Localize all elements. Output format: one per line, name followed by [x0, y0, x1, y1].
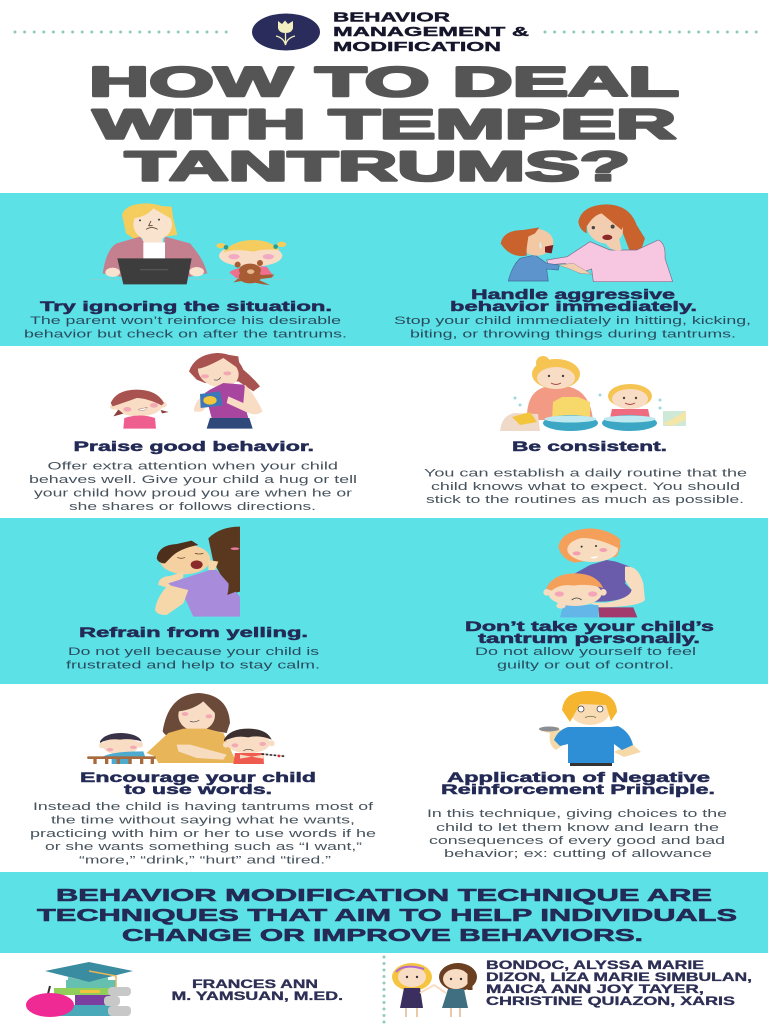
heading: Don’t take your child’s — [465, 618, 714, 634]
body text: Stop your child immediately in hitting, kicking, — [394, 315, 751, 327]
body text: You can establish a daily routine that the — [424, 468, 747, 480]
body text: Do not yell because your child is — [68, 646, 320, 658]
student names — [486, 960, 752, 1008]
heading: Handle aggressive — [471, 286, 675, 302]
icon: tulip logo — [252, 14, 320, 50]
panel: application of negative reinforcement — [427, 691, 727, 860]
heading: tantrum personally. — [478, 630, 700, 646]
body text: the time without saying what he wants, — [51, 814, 355, 826]
panel: praise good behavior — [29, 352, 357, 513]
organisation name: MANAGEMENT & — [333, 24, 529, 39]
panel: don't take tantrum personally — [465, 528, 714, 672]
heading: Be consistent. — [512, 438, 667, 454]
heading: Try ignoring the situation. — [40, 298, 332, 314]
icon: mother holding crying child — [501, 204, 673, 282]
body text — [424, 468, 747, 506]
body text — [30, 801, 376, 866]
banner: definition: CHANGE OR IMPROVE BEHAVIORS. — [122, 925, 643, 945]
icon: mother showing card to daughter — [110, 352, 263, 429]
student names: MAICA ANN JOY TAYER, — [486, 984, 704, 996]
icon: mother with two children — [87, 693, 285, 764]
student names: CHRISTINE QUIAZON, XARIS — [486, 996, 736, 1008]
icon: books, graduation cap and apple — [26, 962, 133, 1017]
organisation name — [333, 10, 529, 54]
body text: guilty or out of control. — [497, 660, 674, 672]
panel: be consistent — [424, 356, 747, 506]
body text: child to let them know and learn the — [436, 822, 719, 834]
header — [15, 10, 764, 54]
body text — [24, 315, 347, 340]
panel: encourage your child to use words — [30, 693, 376, 866]
heading: behavior immediately. — [450, 298, 697, 314]
body text: practicing with him or her to use words if he — [30, 828, 376, 840]
body text — [427, 808, 727, 860]
student names: DIZON, LIZA MARIE SIMBULAN, — [486, 972, 752, 984]
title: WITH TEMPER — [93, 100, 676, 148]
body text: “more,” “drink,” “hurt” and “tired.” — [79, 854, 332, 866]
body text — [394, 315, 751, 340]
title: TANTRUMS? — [125, 142, 630, 190]
heading: Application of Negative — [447, 769, 710, 785]
heading: to use words. — [124, 781, 272, 797]
body text: stick to the routines as much as possible. — [426, 494, 744, 506]
body text: In this technique, giving choices to the — [427, 808, 727, 820]
body text: your child how proud you are when he or — [34, 488, 353, 500]
body text: The parent won’t reinforce his desirable — [30, 315, 341, 327]
body text: Offer extra attention when your child — [48, 460, 338, 472]
icon: mother and child washing clothes — [500, 356, 686, 431]
body text: behavior; ex: cutting of allowance — [444, 848, 712, 860]
instructor name: M. YAMSUAN, M.ED. — [172, 991, 343, 1003]
banner: definition: TECHNIQUES THAT AIM TO HELP INDIVIDUALS — [37, 905, 737, 925]
heading: Praise good behavior. — [74, 438, 314, 454]
heading: Reinforcement Principle. — [441, 781, 715, 797]
body text: behaves well. Give your child a hug or tell — [29, 474, 357, 486]
heading — [465, 618, 714, 646]
body text: frustrated and help to stay calm. — [66, 660, 320, 672]
instructor name — [172, 979, 343, 1003]
body text: behavior but check on after the tantrums. — [24, 328, 347, 340]
icon: two schoolgirls — [392, 963, 477, 1017]
heading: Refrain from yelling. — [79, 624, 308, 640]
icon: mother comforting son — [543, 528, 645, 617]
body text: biting, or throwing things during tantrums. — [410, 328, 736, 340]
body text: she shares or follows directions. — [69, 501, 316, 513]
student names: BONDOC, ALYSSA MARIE — [486, 960, 704, 972]
body text — [66, 646, 320, 672]
heading — [80, 769, 316, 797]
title — [89, 58, 679, 190]
body text: consequences of every good and bad — [429, 835, 725, 847]
heading — [450, 286, 697, 314]
body text — [475, 646, 696, 672]
banner: definition — [0, 872, 768, 953]
icon: mother hugging crying child — [155, 527, 240, 617]
icon: mother at laptop and child with teddy — [90, 203, 286, 285]
body text: child knows what to expect. You should — [431, 481, 740, 493]
body text: Do not allow yourself to feel — [475, 646, 696, 658]
instructor name: FRANCES ANN — [192, 979, 318, 991]
body text — [29, 460, 357, 513]
banner: definition: BEHAVIOR MODIFICATION TECHNIQUE ARE — [56, 885, 712, 905]
body text: Instead the child is having tantrums most of — [33, 801, 374, 813]
panel: try ignoring the situation — [0, 193, 768, 346]
organisation name: MODIFICATION — [333, 39, 501, 54]
title: HOW TO DEAL — [89, 58, 679, 105]
panel: refrain from yelling — [0, 518, 768, 684]
heading — [441, 769, 715, 797]
body text: or she wants something such as “I want,” — [45, 841, 363, 853]
heading: Encourage your child — [80, 769, 316, 785]
organisation name: BEHAVIOR — [333, 10, 451, 24]
icon: confused boy — [539, 691, 641, 766]
panel: handle aggressive behavior — [394, 204, 751, 340]
